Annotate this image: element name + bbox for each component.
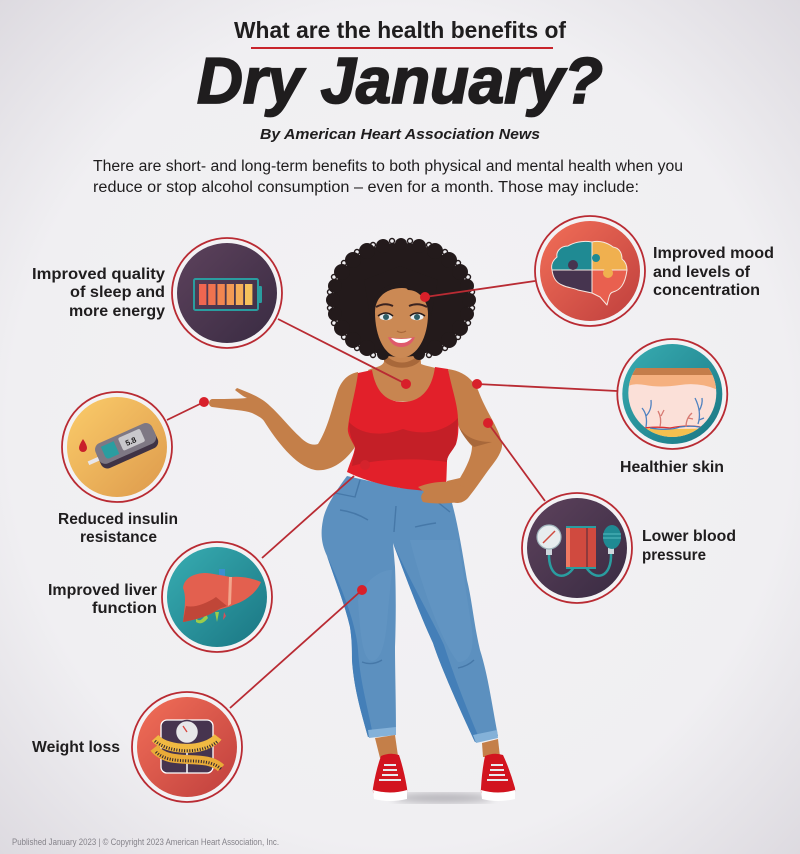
- label: sleep and energy: [32, 266, 165, 320]
- icon: battery: [172, 238, 282, 348]
- jeans cuffs: [368, 727, 498, 743]
- jeans shading: [327, 543, 480, 742]
- connector dots: [199, 292, 493, 595]
- label: liver function: Improved liver: [48, 582, 157, 599]
- title underline: [251, 47, 553, 49]
- nose: [397, 331, 406, 332]
- connector lines: [167, 281, 617, 708]
- eyebrows: [376, 304, 427, 307]
- icon: glucose meter: [62, 392, 172, 502]
- label: liver function: [48, 582, 157, 617]
- intro paragraph: There are short- and long-term benefits to both physical and mental health when you: [93, 158, 683, 175]
- smile: [388, 337, 415, 347]
- label: weight loss: Weight loss: [32, 739, 120, 756]
- ankles: [375, 735, 500, 758]
- intro paragraph: reduce or stop alcohol consumption – even for a month. Those may include:: [93, 179, 639, 196]
- icon: skin cross-section: [617, 339, 727, 449]
- icon: blood pressure cuff: [522, 493, 632, 603]
- tank top: [347, 367, 458, 491]
- right shoe: [481, 754, 515, 801]
- face: [375, 288, 428, 358]
- icon: liver: [162, 542, 272, 652]
- hair mass: [326, 238, 476, 360]
- label: blood pressure: [642, 528, 736, 564]
- label: sleep and energy: more energy: [69, 303, 165, 320]
- icon: brain puzzle: [535, 216, 645, 326]
- byline: By American Heart Association News: [260, 126, 540, 143]
- label: mood and concentration: concentration: [653, 282, 760, 299]
- label: insulin resistance: Reduced insulin: [58, 511, 178, 528]
- right arm shade: [458, 425, 492, 447]
- knee highlights: [358, 540, 472, 662]
- right arm: [447, 369, 502, 503]
- label: blood pressure: Lower blood: [642, 528, 736, 545]
- label: liver function: function: [92, 600, 157, 617]
- label: blood pressure: pressure: [642, 547, 706, 564]
- label: mood and concentration: Improved mood: [653, 245, 774, 262]
- jeans pockets and creases: [335, 480, 474, 668]
- left shoe: [373, 754, 407, 801]
- neck and chest: [368, 345, 440, 402]
- label: mood and concentration: and levels of: [653, 264, 751, 281]
- hair curls: [328, 238, 474, 358]
- main title: Dry January?: [197, 44, 603, 117]
- floor shadow: [393, 793, 493, 803]
- label: healthier skin: Healthier skin: [620, 459, 724, 476]
- intro paragraph: [93, 158, 683, 196]
- left arm: [209, 372, 358, 470]
- title line: What are the health benefits of: [234, 17, 566, 43]
- illustration: woman: [209, 238, 515, 801]
- footer: Published January 2023 | © Copyright 2023 American Heart Association, Inc.: [12, 837, 279, 847]
- neck shadow: [384, 352, 420, 368]
- label: insulin resistance: [58, 511, 178, 546]
- icon: glucose meter: 5.8: [124, 435, 138, 448]
- label: mood and concentration: [653, 245, 774, 299]
- icon: scale and tape: [132, 692, 242, 802]
- label: sleep and energy: of sleep and: [70, 284, 165, 301]
- label: sleep and energy: Improved quality: [32, 266, 165, 283]
- jeans: [322, 476, 498, 742]
- hair fringe: [364, 266, 438, 316]
- hand on hip: [418, 482, 466, 504]
- tank top shading: [349, 418, 458, 466]
- eyes: [378, 313, 425, 320]
- label: insulin resistance: resistance: [80, 529, 157, 546]
